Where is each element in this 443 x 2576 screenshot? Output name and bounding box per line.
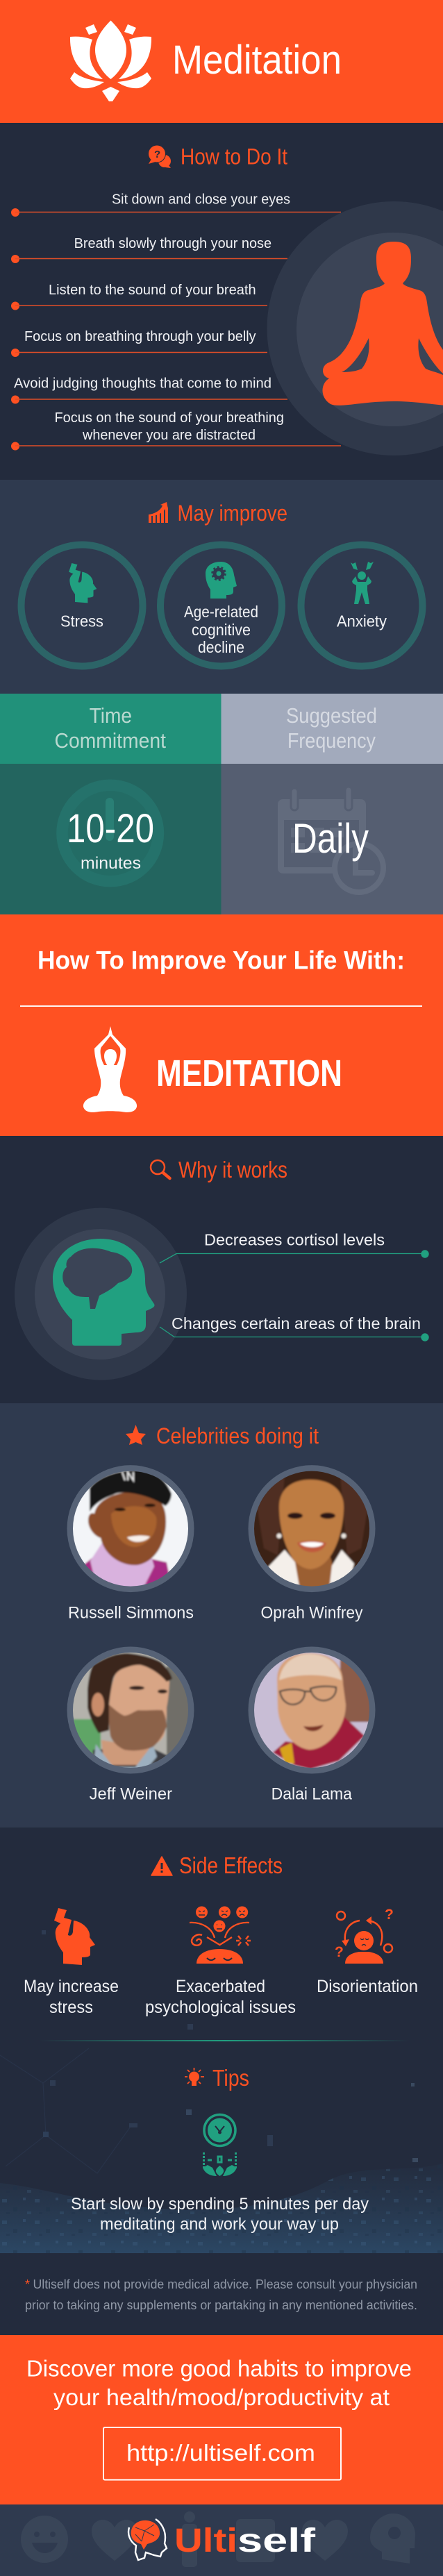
stress circle [21,544,143,667]
value: 10-20 [67,806,154,851]
side effect: psychological [145,1907,296,2017]
panel: why it works [0,1136,443,1404]
label: stress [49,1998,93,2017]
icon: brain head logo [128,2519,167,2560]
label: cognitive [192,621,251,639]
label [24,1977,119,2017]
value [67,806,154,873]
photo: Oprah Winfrey [250,1465,375,1590]
callout: cortisol [160,1231,429,1263]
call to action text [26,2356,412,2410]
label: Dalai Lama [271,1785,353,1804]
heading: side effects [151,1852,283,1878]
icon: seated figure with raised arms [83,1026,137,1112]
call to action text: Discover more good habits to improve [26,2356,412,2382]
disclaimer: * [25,2277,30,2291]
ghost icons [21,2511,415,2567]
network texture background [0,1930,443,2253]
photo: Dalai Lama [250,1649,375,1774]
icon: dizzy person [335,1907,394,1964]
heading [286,703,377,753]
url box: http://ultiself.com [126,2440,315,2466]
label: Russell Simmons [68,1603,194,1622]
url box [103,2427,341,2480]
disclaimer: Ultiself does not provide medical advice. Please consult your physician [33,2277,417,2291]
label: psychological issues [145,1998,296,2017]
heading text: Celebrities doing it [156,1423,319,1448]
tip text: Start slow by spending 5 minutes per day [71,2195,369,2214]
label: Oprah Winfrey [261,1603,362,1622]
heading text: Why it works [178,1157,287,1182]
tip text: meditating and work your way up [100,2215,339,2234]
banner heading: How To Improve Your Life With: [37,946,405,975]
icon: warning [151,1857,172,1875]
icon: clock with lotus [203,2115,237,2176]
icon: head with brain [15,1208,187,1380]
wordmark: Ulti [174,2523,237,2559]
heading text: May improve [178,501,287,526]
label: Anxiety [337,612,387,630]
icon: timer dial [56,779,164,887]
icon: question bubbles: ? [154,149,160,160]
side effect: stress [24,1908,119,2017]
label [145,1977,296,2017]
tip text [71,2195,369,2234]
icon: magnifier [151,1160,169,1178]
disclaimer: prior to taking any supplements or partaking in any mentioned activities. [25,2298,417,2312]
icon: rising chart [149,502,168,523]
callout: brain areas: Changes certain areas of the brain [172,1314,421,1332]
heading [151,1157,287,1182]
step 2 [11,236,287,263]
heading: Frequency [287,728,376,753]
panel: footer [0,2504,443,2576]
panel: how to improve banner [0,914,443,1137]
step 6: whenever you are distracted [82,428,256,443]
label: Jeff Weiner [90,1785,172,1804]
step 4 [11,329,267,357]
call to action text: your health/mood/productivity at [53,2384,390,2410]
icon: dizzy person: ? [335,1944,344,1960]
label: decline [198,638,244,656]
panel: may improve [0,480,443,694]
step 6: Focus on the sound of your breathing [54,410,284,426]
step 5 [11,376,287,404]
icon: head with gear [206,562,237,599]
step 5: Avoid judging thoughts that come to mind [14,376,271,392]
disclaimer [25,2277,417,2312]
step 4: Focus on breathing through your belly [24,329,256,344]
logo [128,2519,316,2560]
label: Disorientation [317,1977,418,1996]
heading [149,501,287,526]
icon: dizzy person: ? [385,1907,394,1923]
heading [148,144,287,169]
header banner [0,0,443,123]
step 6 [11,410,341,450]
icon: head with emotions [190,1907,251,1964]
icon: meditating person in circles [267,201,443,455]
step 3: Listen to the sound of your breath [49,283,256,298]
photo: Jeff Weiner [69,1649,194,1778]
panel: suggested frequency [221,694,443,915]
panel: call to action [0,2335,443,2504]
panel: time commitment [0,694,221,915]
banner title: MEDITATION [156,1053,342,1094]
icon: lotus [70,21,151,101]
callout: cortisol: Decreases cortisol levels [204,1231,385,1249]
heading text: Tips [212,2065,249,2091]
step 1: Sit down and close your eyes [112,192,290,208]
heading: Suggested [286,703,377,728]
heading [54,703,166,753]
step 3 [11,283,267,310]
value: Daily [292,815,369,862]
value: minutes [81,854,141,873]
callout: brain areas [160,1314,429,1341]
cognitive decline circle [160,544,282,667]
wordmark [174,2523,316,2559]
step 2: Breath slowly through your nose [74,236,271,251]
panel: how to do it [0,123,443,480]
photo: Russell Simmons [69,1465,194,1597]
heading: Commitment [54,728,166,753]
label: Age-related [184,603,258,621]
icon: question bubbles [148,144,171,168]
heading: tips [185,2065,249,2091]
heading text: How to Do It [181,144,287,169]
label: Stress [60,612,103,630]
label: May increase [24,1977,119,1996]
heading [126,1423,319,1448]
icon: star [126,1425,146,1445]
panel: celebrities [0,1403,443,1828]
anxiety circle [301,544,422,667]
side effect: disorientation [317,1907,418,1996]
label: Exacerbated [176,1977,265,1996]
icon: light bulb [185,2068,204,2086]
heading: Time [90,703,132,728]
icon: stressed head [54,1908,95,1965]
title: Meditation [172,37,342,83]
step 1 [11,192,341,217]
label [184,603,258,656]
wordmark: self [237,2523,316,2559]
panel: side effects and tips [0,1828,443,2336]
icon: anxious figure [351,562,374,604]
icon: calendar with clock [278,787,383,892]
heading text: Side Effects [179,1852,283,1878]
icon: stressed head [69,563,97,603]
